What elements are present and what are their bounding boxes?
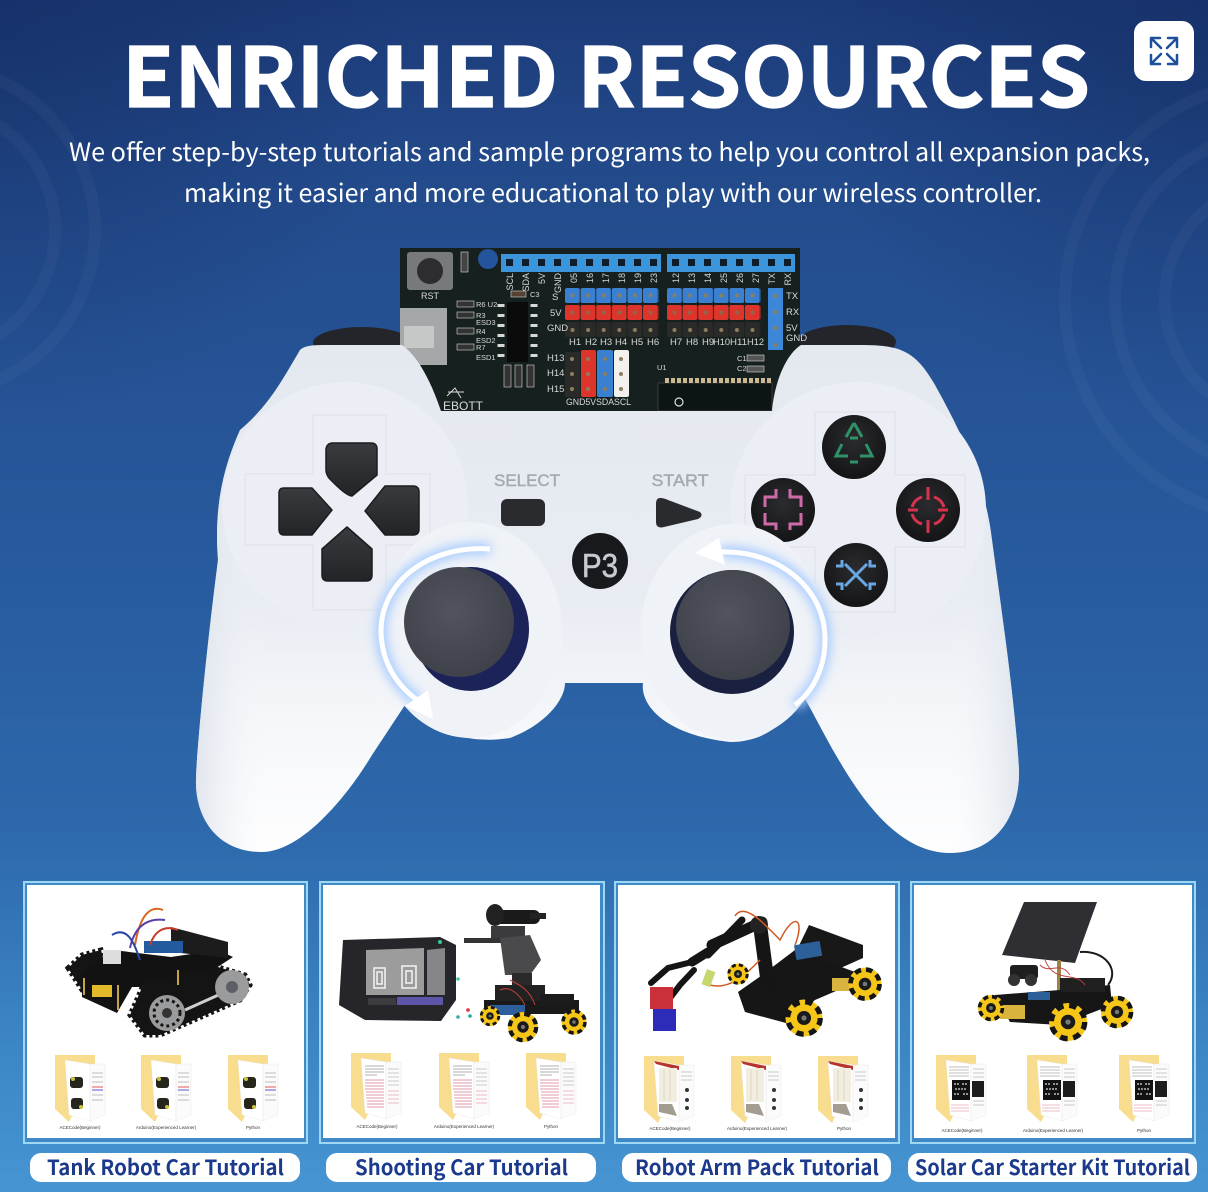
header pin labels: TX [767,273,777,285]
rotation arrow right [695,538,825,705]
row labels: H15 [547,384,564,395]
robot: shooting turret car [464,904,586,1042]
button: circle [896,478,960,542]
action pad disc [730,382,986,638]
side header [768,288,783,350]
expansion board: R6 U2 [476,300,497,309]
usb port [400,308,447,365]
folder: Python: Python [544,1124,558,1129]
row labels: H6 [647,337,659,348]
expansion board: R4 [476,327,486,336]
label: shooting car tutorial: Shooting Car Tutorial [355,1152,568,1182]
row labels: H14 [547,368,564,379]
folder: Python: Python [837,1126,851,1131]
folder: Arduino: Arduino(Experienced Learner) [727,1126,788,1131]
row labels: TX [786,291,799,302]
row labels: RX [786,307,800,318]
expansion board: R3 [476,311,486,320]
row labels: 5V [786,323,798,334]
header pin labels: SCL [505,273,515,291]
expansion board [400,248,807,413]
header pin labels: 18 [617,273,627,283]
label: robot arm pack tutorial: Robot Arm Pack Tutorial [635,1152,879,1182]
expansion board: C3 [530,290,540,299]
row labels: H2 [585,337,597,348]
expansion board: ESD2 [476,336,496,345]
p3 button: P3 [582,547,618,584]
expansion board: C2 [737,364,747,373]
cross recess lines [245,412,965,612]
folder: ACECode: ACECode(Beginner) [941,1128,983,1133]
row labels: H9 [702,337,714,348]
right joystick [641,524,825,740]
display module [658,380,772,411]
expansion board: ESD1 [476,353,496,362]
folder: Python: Python [1137,1128,1151,1133]
row labels: 5V [550,308,562,319]
mounting hole [478,249,498,269]
d-pad buttons [279,443,419,581]
row labels: H10 [713,337,730,348]
label: tank robot car tutorial: Tank Robot Car Tutorial [47,1152,284,1182]
folder: Arduino: Arduino(Experienced Learner) [1023,1128,1084,1133]
folder: Arduino: Arduino(Experienced Learner) [434,1124,495,1129]
subtitle text: We offer step-by-step tutorials and sample programs to help you control all expansion packs, [69,133,1150,169]
row labels: H5 [631,337,643,348]
expansion board: C1 [737,354,747,363]
row labels: S [552,292,558,303]
folder: Python [526,1053,576,1129]
folder: ACECode [351,1053,401,1129]
subtitle text: making it easier and more educational to play with our wireless controller. [184,174,1042,210]
header pin labels: 23 [649,273,659,283]
header pin labels: 19 [633,273,643,283]
select button [501,499,545,526]
header pin labels [505,272,793,293]
subtitle text [69,133,1150,210]
target box [339,937,456,1021]
header pin labels: 16 [585,273,595,283]
header pin labels: 26 [735,273,745,283]
controller shoulder buttons [313,325,896,359]
button: triangle [822,415,886,479]
folder: Python [228,1055,278,1130]
expansion board: U1 [657,363,667,372]
header pin labels: 13 [687,273,697,283]
row labels: H4 [615,337,627,348]
panel: solar car starter kit tutorial [911,882,1195,1143]
folder: Python: Python [246,1125,260,1130]
logo [443,388,484,413]
folder: Arduino [1023,1055,1084,1133]
header pin labels: 25 [719,273,729,283]
folder: Arduino: Arduino(Experienced Learner) [136,1125,197,1130]
header pin labels: 14 [703,273,713,283]
folder: ACECode: ACECode(Beginner) [59,1125,101,1130]
header pin labels: 5V [537,273,547,284]
folder: Python [818,1056,868,1131]
row labels: H8 [686,337,698,348]
controller body [196,345,1019,853]
robot: tank [68,909,250,1035]
select and start labels [494,471,708,490]
H13-H15 pin block [565,350,629,397]
folder: Arduino [434,1053,495,1129]
row labels: H12 [747,337,764,348]
folder: ACECode: ACECode(Beginner) [649,1126,691,1131]
row labels: H13 [547,353,564,364]
pin rows [565,288,761,337]
header pin labels: GND [553,272,563,293]
panel: shooting car tutorial [320,882,604,1143]
robot: arm car [650,911,882,1036]
left joystick [378,522,562,738]
header pin labels: 17 [601,273,611,283]
expansion board: ESD3 [476,318,496,327]
label: solar car starter kit tutorial: Solar Car Starter Kit Tutorial [915,1152,1190,1182]
start button [656,498,702,527]
small components [457,252,764,387]
folder: ACECode [644,1056,694,1131]
button: square [751,478,815,542]
d-pad disc [222,382,468,628]
header pin labels: 27 [751,273,761,283]
row labels: H7 [670,337,682,348]
chip [501,302,534,362]
expansion board: R7 [476,343,486,352]
folder: ACECode [55,1055,105,1130]
row labels: GND [786,333,807,344]
folder: Python [1119,1055,1169,1133]
reset button: RST [421,291,440,301]
row labels [547,291,807,408]
row labels: H1 [569,337,581,348]
row labels: GND5VSDASCL [566,397,631,408]
reset button [407,252,453,301]
projectiles [438,940,472,1019]
p3 button [572,533,628,589]
header pin labels: SDA [521,273,531,292]
header pin labels: 05 [569,273,579,283]
folder: Arduino [727,1056,788,1131]
rotation arrow left [381,549,490,719]
panel: tank robot car tutorial [24,882,307,1143]
row labels: H3 [600,337,612,348]
folder: Arduino [136,1055,197,1130]
row labels: GND [547,323,568,334]
header pin labels: 12 [671,273,681,283]
blue header strips [501,254,795,272]
panel: robot arm pack tutorial [615,882,899,1143]
header pin labels: RX [783,273,793,286]
icon: expand button [1134,21,1194,81]
select and start labels: SELECT [494,471,560,490]
select and start labels: START [652,471,708,490]
folder: ACECode [936,1055,986,1133]
logo: EBOTT [443,399,484,413]
robot: solar car [978,902,1133,1041]
title: ENRICHED RESOURCES [122,12,1090,131]
button: cross [824,543,888,607]
folder: ACECode: ACECode(Beginner) [356,1124,398,1129]
row labels: H11 [730,337,747,348]
